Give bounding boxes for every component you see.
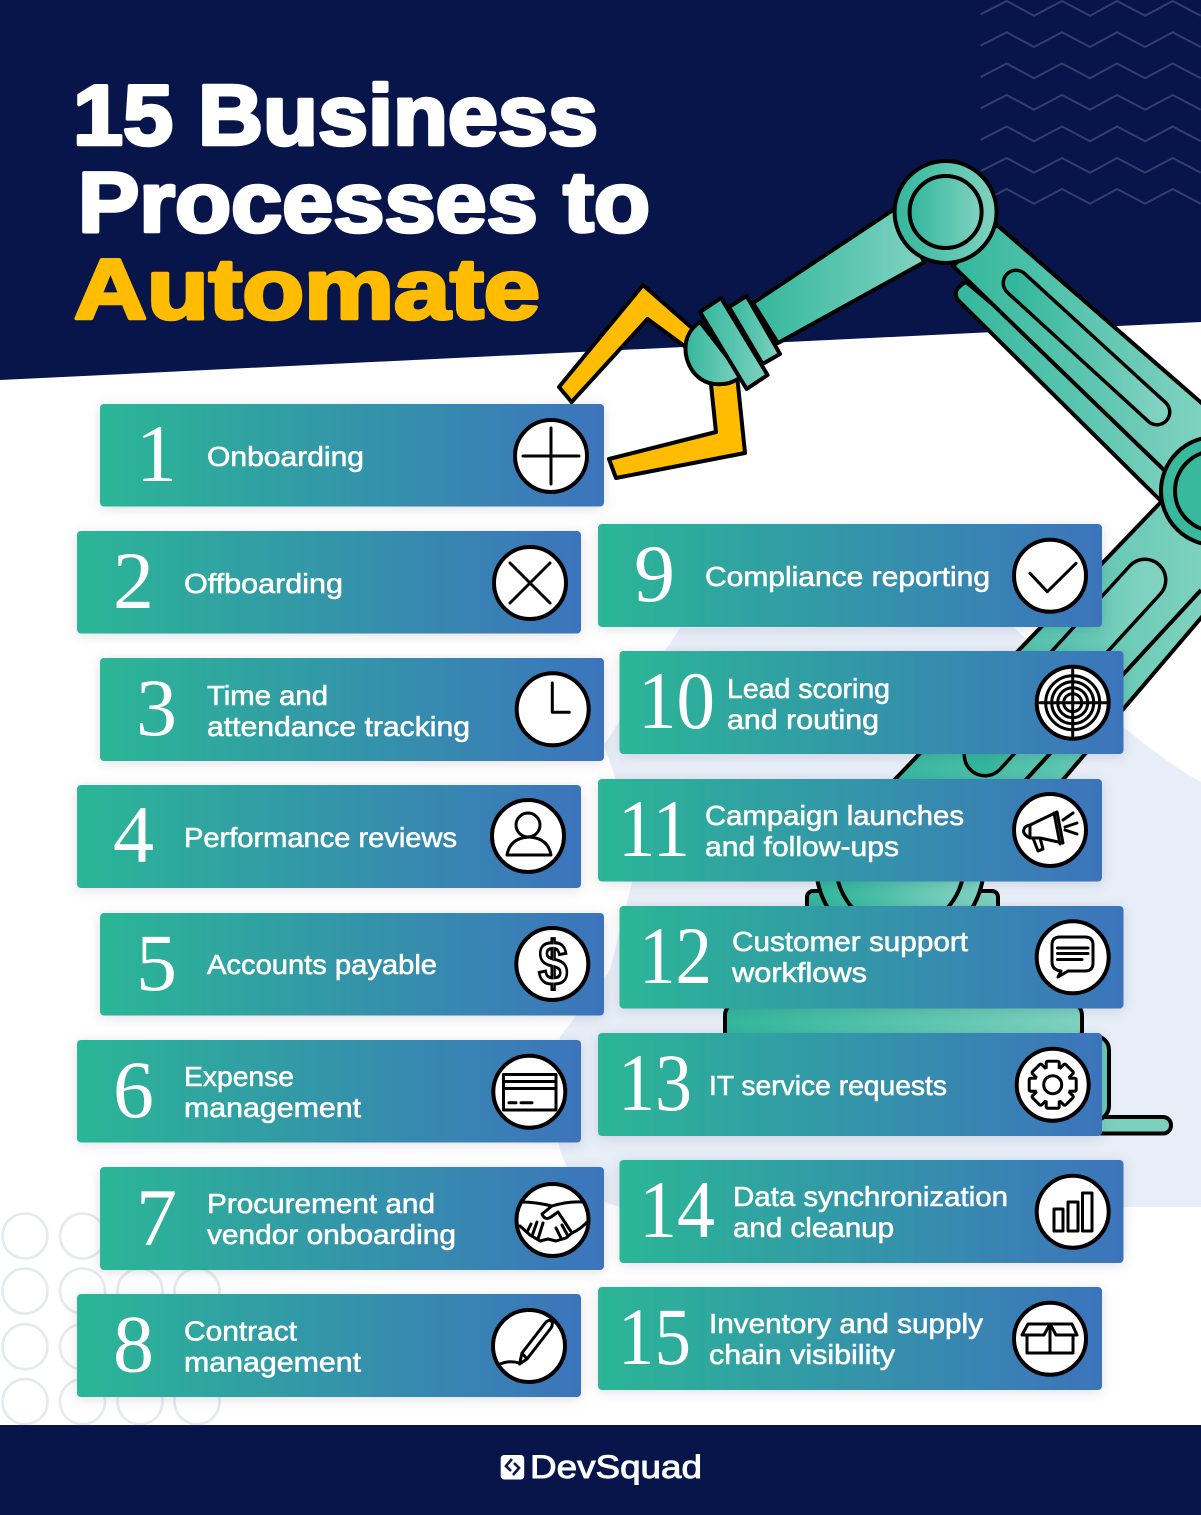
card 11: Campaign launches and follow-ups: 11 [618, 783, 690, 874]
shoulder joint [895, 161, 997, 263]
yellow gripper claw upper [559, 285, 700, 402]
icon: bar chart [1037, 1176, 1109, 1248]
header banner [0, 0, 1201, 380]
card 11: Campaign launches and follow-ups: and follow-ups [705, 831, 899, 862]
robot base body [725, 1036, 1109, 1120]
robot base plate [725, 1003, 1082, 1043]
card 4: Performance reviews: Performance reviews [184, 822, 457, 853]
main arm link [953, 225, 1201, 525]
card 11: Campaign launches and follow-ups [598, 779, 1102, 882]
icon: dollar: $ [538, 930, 568, 999]
main arm back layer [956, 282, 1190, 502]
card 6: Expense management: Expense [184, 1061, 294, 1092]
chevron pattern [981, 1, 1201, 204]
footer logo [501, 1449, 702, 1485]
card 13: IT service requests [598, 1033, 1102, 1136]
yellow gripper claw lower [609, 375, 745, 478]
icon: plus [515, 420, 587, 492]
card 11: Campaign launches and follow-ups: Campaign launches [705, 800, 964, 831]
icon: credit card [493, 1056, 565, 1128]
card 15: Inventory and supply chain visibility [598, 1287, 1102, 1390]
card 13: IT service requests: 13 [618, 1037, 692, 1128]
card 5: Accounts payable: 5 [136, 917, 177, 1008]
card 7: Procurement and vendor onboarding: 7 [136, 1172, 177, 1263]
card 3: Time and attendance tracking: attendance tracking [207, 711, 470, 742]
icon: handshake [516, 1184, 588, 1256]
card 2: Offboarding: Offboarding [184, 568, 343, 599]
dot circle pattern [2, 1214, 220, 1424]
card 2: Offboarding [77, 531, 581, 634]
icon: person [492, 800, 564, 872]
card 14: Data synchronization and cleanup: and cleanup [733, 1212, 894, 1243]
upper arm link [753, 210, 924, 343]
card 6: Expense management [77, 1040, 581, 1142]
card 1: Onboarding: Onboarding [207, 441, 364, 472]
card 7: Procurement and vendor onboarding [100, 1167, 604, 1270]
icon: cross [494, 547, 566, 619]
card 13: IT service requests: IT service requests [709, 1070, 947, 1101]
card 3: Time and attendance tracking: 3 [136, 662, 177, 753]
wrist flange inner [700, 298, 768, 389]
robot arm illustration [559, 161, 1201, 1134]
card 9: Compliance reporting [598, 524, 1102, 627]
robot forearm [880, 500, 1201, 797]
card 5: Accounts payable: Accounts payable [207, 949, 437, 980]
card 12: Customer support workflows: workflows [731, 957, 867, 988]
card 4: Performance reviews: 4 [113, 789, 154, 880]
title: Processes to [78, 156, 650, 250]
card 8: Contract management [77, 1294, 581, 1397]
logo mark [501, 1455, 524, 1480]
icon: megaphone [1014, 794, 1086, 866]
card 3: Time and attendance tracking [100, 658, 604, 761]
card 14: Data synchronization and cleanup: Data synchronization [733, 1181, 1008, 1212]
card 15: Inventory and supply chain visibility: chain visibility [709, 1339, 895, 1370]
card 3: Time and attendance tracking: Time and [207, 680, 328, 711]
card 12: Customer support workflows: 12 [639, 910, 712, 1001]
icon: gear [1017, 1049, 1089, 1121]
card 6: Expense management: management [184, 1092, 361, 1123]
card 10: Lead scoring and routing: 10 [638, 655, 715, 746]
card 14: Data synchronization and cleanup [620, 1160, 1124, 1263]
robot base foot [1040, 1117, 1171, 1134]
card 2: Offboarding: 2 [113, 535, 154, 626]
title [73, 68, 650, 338]
wrist flange outer [729, 296, 780, 364]
card 1: Onboarding: 1 [136, 408, 177, 499]
icon: check mark [1014, 540, 1086, 612]
elbow joint [1161, 437, 1201, 545]
card 9: Compliance reporting: Compliance reporting [705, 561, 990, 592]
card 9: Compliance reporting: 9 [634, 528, 675, 619]
card 7: Procurement and vendor onboarding: vendor onboarding [207, 1219, 456, 1250]
footer band [0, 1425, 1201, 1515]
icon: clock [517, 673, 589, 745]
card 8: Contract management: management [184, 1346, 361, 1378]
card 6: Expense management: 6 [113, 1044, 154, 1135]
main arm slot [1016, 283, 1157, 412]
icon: open box [1014, 1303, 1086, 1375]
title: Automate [74, 242, 540, 338]
card 10: Lead scoring and routing [620, 651, 1124, 754]
card 7: Procurement and vendor onboarding: Procurement and [207, 1188, 435, 1219]
card 8: Contract management: 8 [113, 1298, 154, 1390]
icon: dollar [516, 928, 588, 1000]
card 10: Lead scoring and routing: and routing [727, 704, 879, 735]
card 8: Contract management: Contract [184, 1316, 297, 1346]
title: 15 Business [73, 68, 598, 164]
icon: target [1037, 667, 1109, 739]
wrist hemisphere [686, 322, 742, 384]
robot base dome [816, 781, 984, 949]
card 14: Data synchronization and cleanup: 14 [639, 1164, 715, 1255]
card 15: Inventory and supply chain visibility: Inventory and supply [709, 1308, 983, 1339]
card 1: Onboarding [100, 404, 604, 506]
card 12: Customer support workflows [620, 906, 1124, 1008]
pale background shape [555, 627, 1201, 1207]
card 15: Inventory and supply chain visibility: 15 [618, 1291, 691, 1382]
card 4: Performance reviews [77, 785, 581, 888]
card 10: Lead scoring and routing: Lead scoring [727, 673, 890, 704]
card 12: Customer support workflows: Customer support [732, 926, 968, 957]
logo wordmark: DevSquad [530, 1449, 702, 1485]
icon: chat bubble [1037, 921, 1109, 993]
robot base block [807, 891, 998, 961]
icon: pen [493, 1310, 565, 1382]
card 5: Accounts payable [100, 913, 604, 1016]
